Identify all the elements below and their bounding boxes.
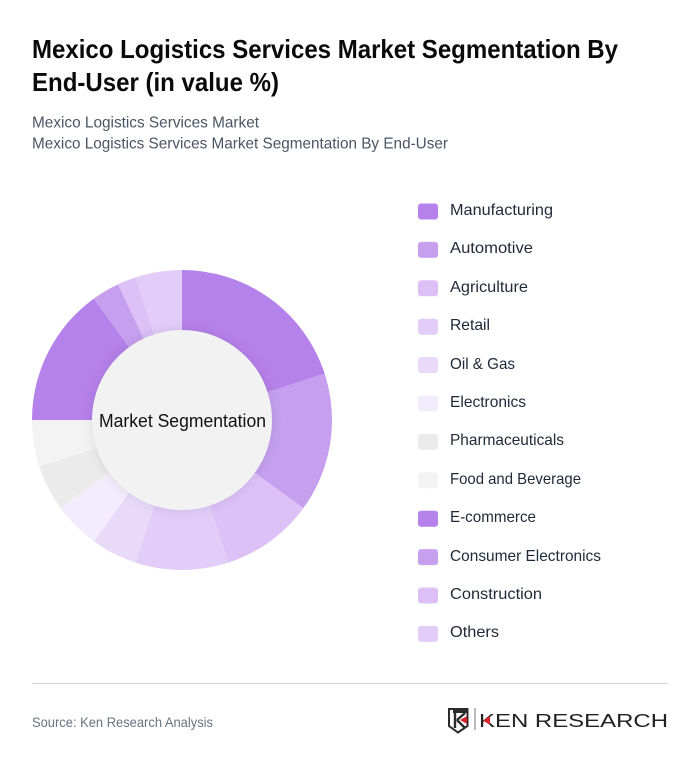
legend item: E-commerce: E-commerce (450, 509, 536, 526)
centre label: Market Segmentation (99, 411, 266, 431)
segment: Consumer Electronics (62, 300, 302, 540)
legend item: Pharmaceuticals: Pharmaceuticals (450, 432, 564, 449)
legend item: Electronics (418, 394, 526, 412)
subtitle (32, 114, 449, 152)
legend item: Manufacturing: Manufacturing (450, 202, 553, 219)
legend item: Oil & Gas: Oil & Gas (450, 356, 515, 373)
logo wordmark: KEN RESEARCH (479, 711, 668, 731)
segment: Automotive (62, 300, 302, 540)
donut chart (62, 300, 302, 540)
segment: Oil & Gas (62, 300, 302, 540)
legend item: E-commerce (418, 509, 536, 527)
logo: Ken Research (449, 708, 668, 732)
segment: Others (62, 300, 302, 540)
icon: shield (449, 709, 468, 732)
title: Mexico Logistics Services Market Segmentation By (32, 34, 618, 64)
legend item: Agriculture (418, 279, 528, 296)
legend item: Others: Others (450, 624, 499, 641)
legend item: Electronics: Electronics (450, 394, 526, 411)
legend item: Automotive (418, 240, 533, 258)
subtitle: Mexico Logistics Services Market (32, 114, 260, 132)
segment: Electronics (62, 300, 302, 540)
legend item: Others (418, 624, 499, 642)
donut centre (92, 330, 272, 510)
title: End-User (in value %) (32, 67, 279, 97)
legend item: Agriculture: Agriculture (450, 279, 528, 296)
legend item: Oil & Gas (418, 356, 515, 373)
title (32, 34, 618, 97)
legend item: Consumer Electronics: Consumer Electronics (450, 548, 601, 565)
segment: Agriculture (62, 300, 302, 540)
segment: Retail (62, 300, 302, 540)
segment: Pharmaceuticals (62, 300, 302, 540)
legend item: Automotive: Automotive (450, 240, 533, 257)
legend item: Food and Beverage: Food and Beverage (450, 471, 581, 488)
legend (418, 202, 601, 642)
source note: Source: Ken Research Analysis (32, 714, 213, 730)
segment: Manufacturing (62, 300, 302, 540)
legend item: Retail: Retail (450, 317, 490, 334)
segment: Construction (62, 300, 302, 540)
segment: Food and Beverage (62, 300, 302, 540)
legend item: Construction: Construction (450, 586, 542, 603)
segment: E-commerce (62, 300, 302, 540)
legend item: Retail (418, 317, 490, 335)
subtitle: Mexico Logistics Services Market Segmentation By End-User (32, 136, 449, 152)
